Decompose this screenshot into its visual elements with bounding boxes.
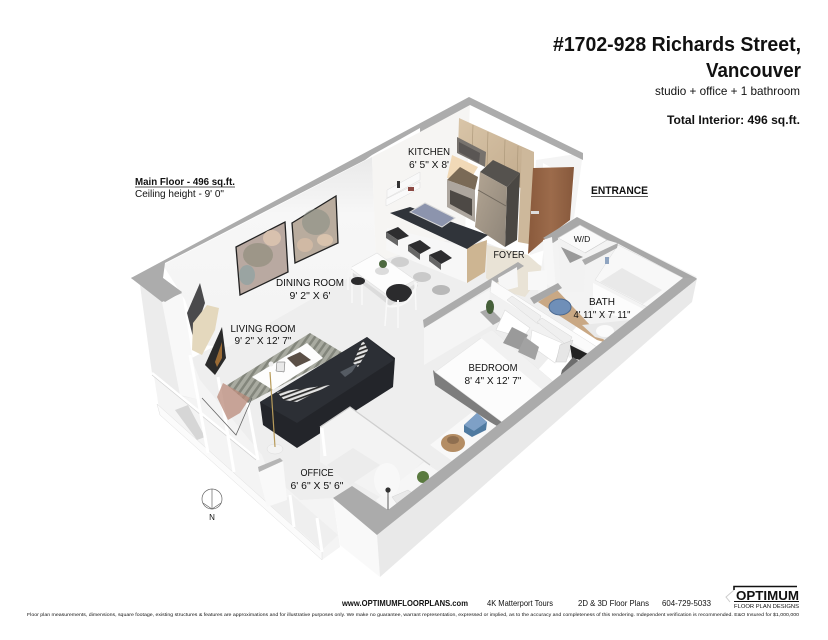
under cabinet light — [447, 155, 478, 180]
entrance label: ENTRANCE — [591, 185, 648, 197]
stove — [447, 167, 478, 222]
logo: FLOOR PLAN DESIGNS — [734, 604, 799, 610]
exterior walls, south east — [333, 278, 697, 577]
main floor note — [135, 176, 235, 200]
bedroom walls — [423, 262, 597, 365]
closet walls — [543, 237, 556, 290]
refrigerator — [475, 160, 520, 247]
title block — [553, 34, 801, 127]
office partition and desk — [320, 407, 445, 520]
footer contact line: 2D & 3D Floor Plans — [578, 598, 649, 608]
washer dryer: W/D — [574, 234, 590, 244]
title: #1702-928 Richards Street, — [553, 34, 801, 56]
label: office size: 6' 6" X 5' 6" — [290, 480, 344, 492]
foyer floor — [486, 245, 545, 297]
kitchen side partition — [372, 103, 470, 262]
footer contact line — [341, 598, 711, 608]
armchair — [202, 383, 252, 435]
bench with hat and towels — [430, 412, 497, 470]
kitchen — [386, 118, 534, 295]
tall cabinet — [518, 148, 534, 245]
balcony glazing and exterior slab — [140, 285, 340, 560]
subtitle: studio + office + 1 bathroom — [655, 84, 800, 98]
logo: OPTIMUM — [736, 588, 799, 603]
footer contact line: www.OPTIMUMFLOORPLANS.com — [341, 598, 468, 608]
main floor note: Main Floor - 496 sq.ft. — [135, 176, 235, 188]
label: dining size: 9' 2" X 6' — [290, 290, 330, 302]
nightstand plant — [480, 300, 502, 325]
partition strip — [582, 243, 618, 265]
desk chair — [374, 463, 400, 497]
total interior: Total Interior: 496 sq.ft. — [667, 113, 800, 127]
desk — [376, 462, 445, 520]
bathroom wall strip — [543, 217, 696, 278]
vanity — [538, 290, 607, 343]
disclaimer: Floor plan measurements, dimensions, square footage, existing structures & features are approximations and for illustrative purposes only. We make no guarantee, warrant representation, expressed or implied, as to the accuracy and completeness of this rendering. Independent verification is recommended. E&O Insured for $1,000,000 — [27, 612, 800, 617]
label: living room: LIVING ROOM — [230, 323, 296, 335]
column — [258, 460, 287, 507]
sofa — [260, 337, 395, 448]
back wall: dining and living — [163, 157, 376, 347]
headboard cushions — [507, 296, 541, 324]
north compass — [202, 489, 222, 522]
counter top — [390, 207, 488, 249]
label: kitchen size: 6' 5" X 8' — [409, 159, 449, 171]
pillows — [496, 310, 530, 338]
bathroom — [528, 217, 697, 345]
plant — [417, 471, 429, 483]
label: foyer: FOYER — [494, 249, 525, 261]
painting 1 — [236, 222, 288, 295]
sink — [410, 203, 455, 227]
label: bath: BATH — [589, 296, 615, 308]
north compass: N — [209, 513, 215, 522]
floor — [165, 225, 600, 510]
footer contact line: 4K Matterport Tours — [487, 598, 553, 608]
desk lamp — [384, 487, 392, 515]
label: dining room: DINING ROOM — [276, 277, 344, 289]
dining set — [348, 252, 418, 328]
label: living size: 9' 2" X 12' 7" — [234, 335, 292, 347]
wall shelf — [387, 172, 420, 198]
coffee table — [252, 343, 323, 390]
logo — [726, 586, 799, 610]
column front — [162, 293, 200, 400]
title line 2: Vancouver — [706, 60, 801, 82]
bed — [433, 296, 590, 430]
back wall top strips — [131, 97, 583, 302]
upper cabinets — [458, 118, 534, 195]
counter base — [467, 240, 487, 283]
entrance door — [528, 153, 583, 255]
bathtub alcove — [593, 245, 683, 320]
label: bedroom: BEDROOM — [468, 362, 518, 374]
corner block — [131, 265, 182, 302]
floor plan 3D model — [131, 97, 697, 577]
microwave — [457, 137, 486, 167]
towels — [464, 413, 487, 437]
label: kitchen: KITCHEN — [408, 146, 450, 158]
hat — [441, 434, 465, 452]
main floor note: Ceiling height - 9' 0" — [135, 188, 224, 200]
far nightstand — [560, 357, 580, 378]
floor lamp — [267, 362, 283, 454]
bar stools — [386, 227, 452, 295]
TV and console — [187, 283, 226, 375]
label: bath size: 4' 11" X 7' 11" — [574, 309, 631, 321]
living room rug — [227, 333, 343, 403]
painting 2 — [292, 196, 338, 263]
room labels — [230, 146, 631, 492]
label: bedroom size: 8' 4" X 12' 7" — [464, 375, 522, 387]
washer dryer — [558, 225, 607, 292]
footer contact line: 604-729-5033 — [662, 598, 711, 608]
label: office: OFFICE — [300, 467, 334, 479]
